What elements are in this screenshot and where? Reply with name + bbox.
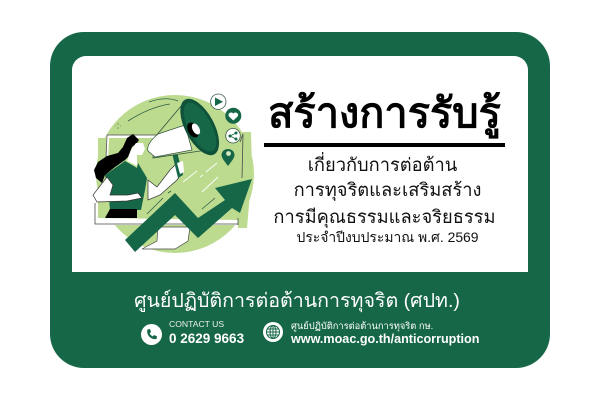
- woman: [93, 134, 183, 218]
- megaphone: [148, 93, 227, 178]
- decorative arcs and screen lines: [115, 99, 218, 214]
- icon: phone: [141, 324, 162, 345]
- icon: globe: [263, 322, 283, 342]
- white content panel: [72, 56, 528, 272]
- organisation name: ศูนย์ปฏิบัติการต่อต้านการทุจริต (ศปท.): [134, 290, 460, 312]
- department label: ศูนย์ปฏิบัติการต่อต้านการทุจริต กษ.: [291, 321, 433, 331]
- social icons: [211, 94, 241, 166]
- website url: www.moac.go.th/anticorruption: [291, 332, 479, 346]
- subtitle line 2: การทุจริตและเสริมสร้าง: [294, 179, 481, 200]
- rising green arrow: [125, 179, 252, 252]
- green circle backdrop: [96, 95, 254, 253]
- subtitle lines: [273, 152, 496, 245]
- fiscal year line: ประจำปีงบประมาณ พ.ศ. 2569: [296, 229, 478, 245]
- subtitle line 1: เกี่ยวกับการต่อต้าน: [308, 154, 457, 175]
- phone number: 0 2629 9663: [169, 331, 244, 346]
- contact label: CONTACT US: [169, 319, 224, 329]
- subtitle line 3: การมีคุณธรรมและจริยธรรม: [273, 206, 496, 227]
- monitor: [95, 132, 252, 249]
- green card background: [50, 32, 550, 368]
- title underline: [264, 143, 505, 147]
- main title: สร้างการรับรู้: [268, 89, 501, 136]
